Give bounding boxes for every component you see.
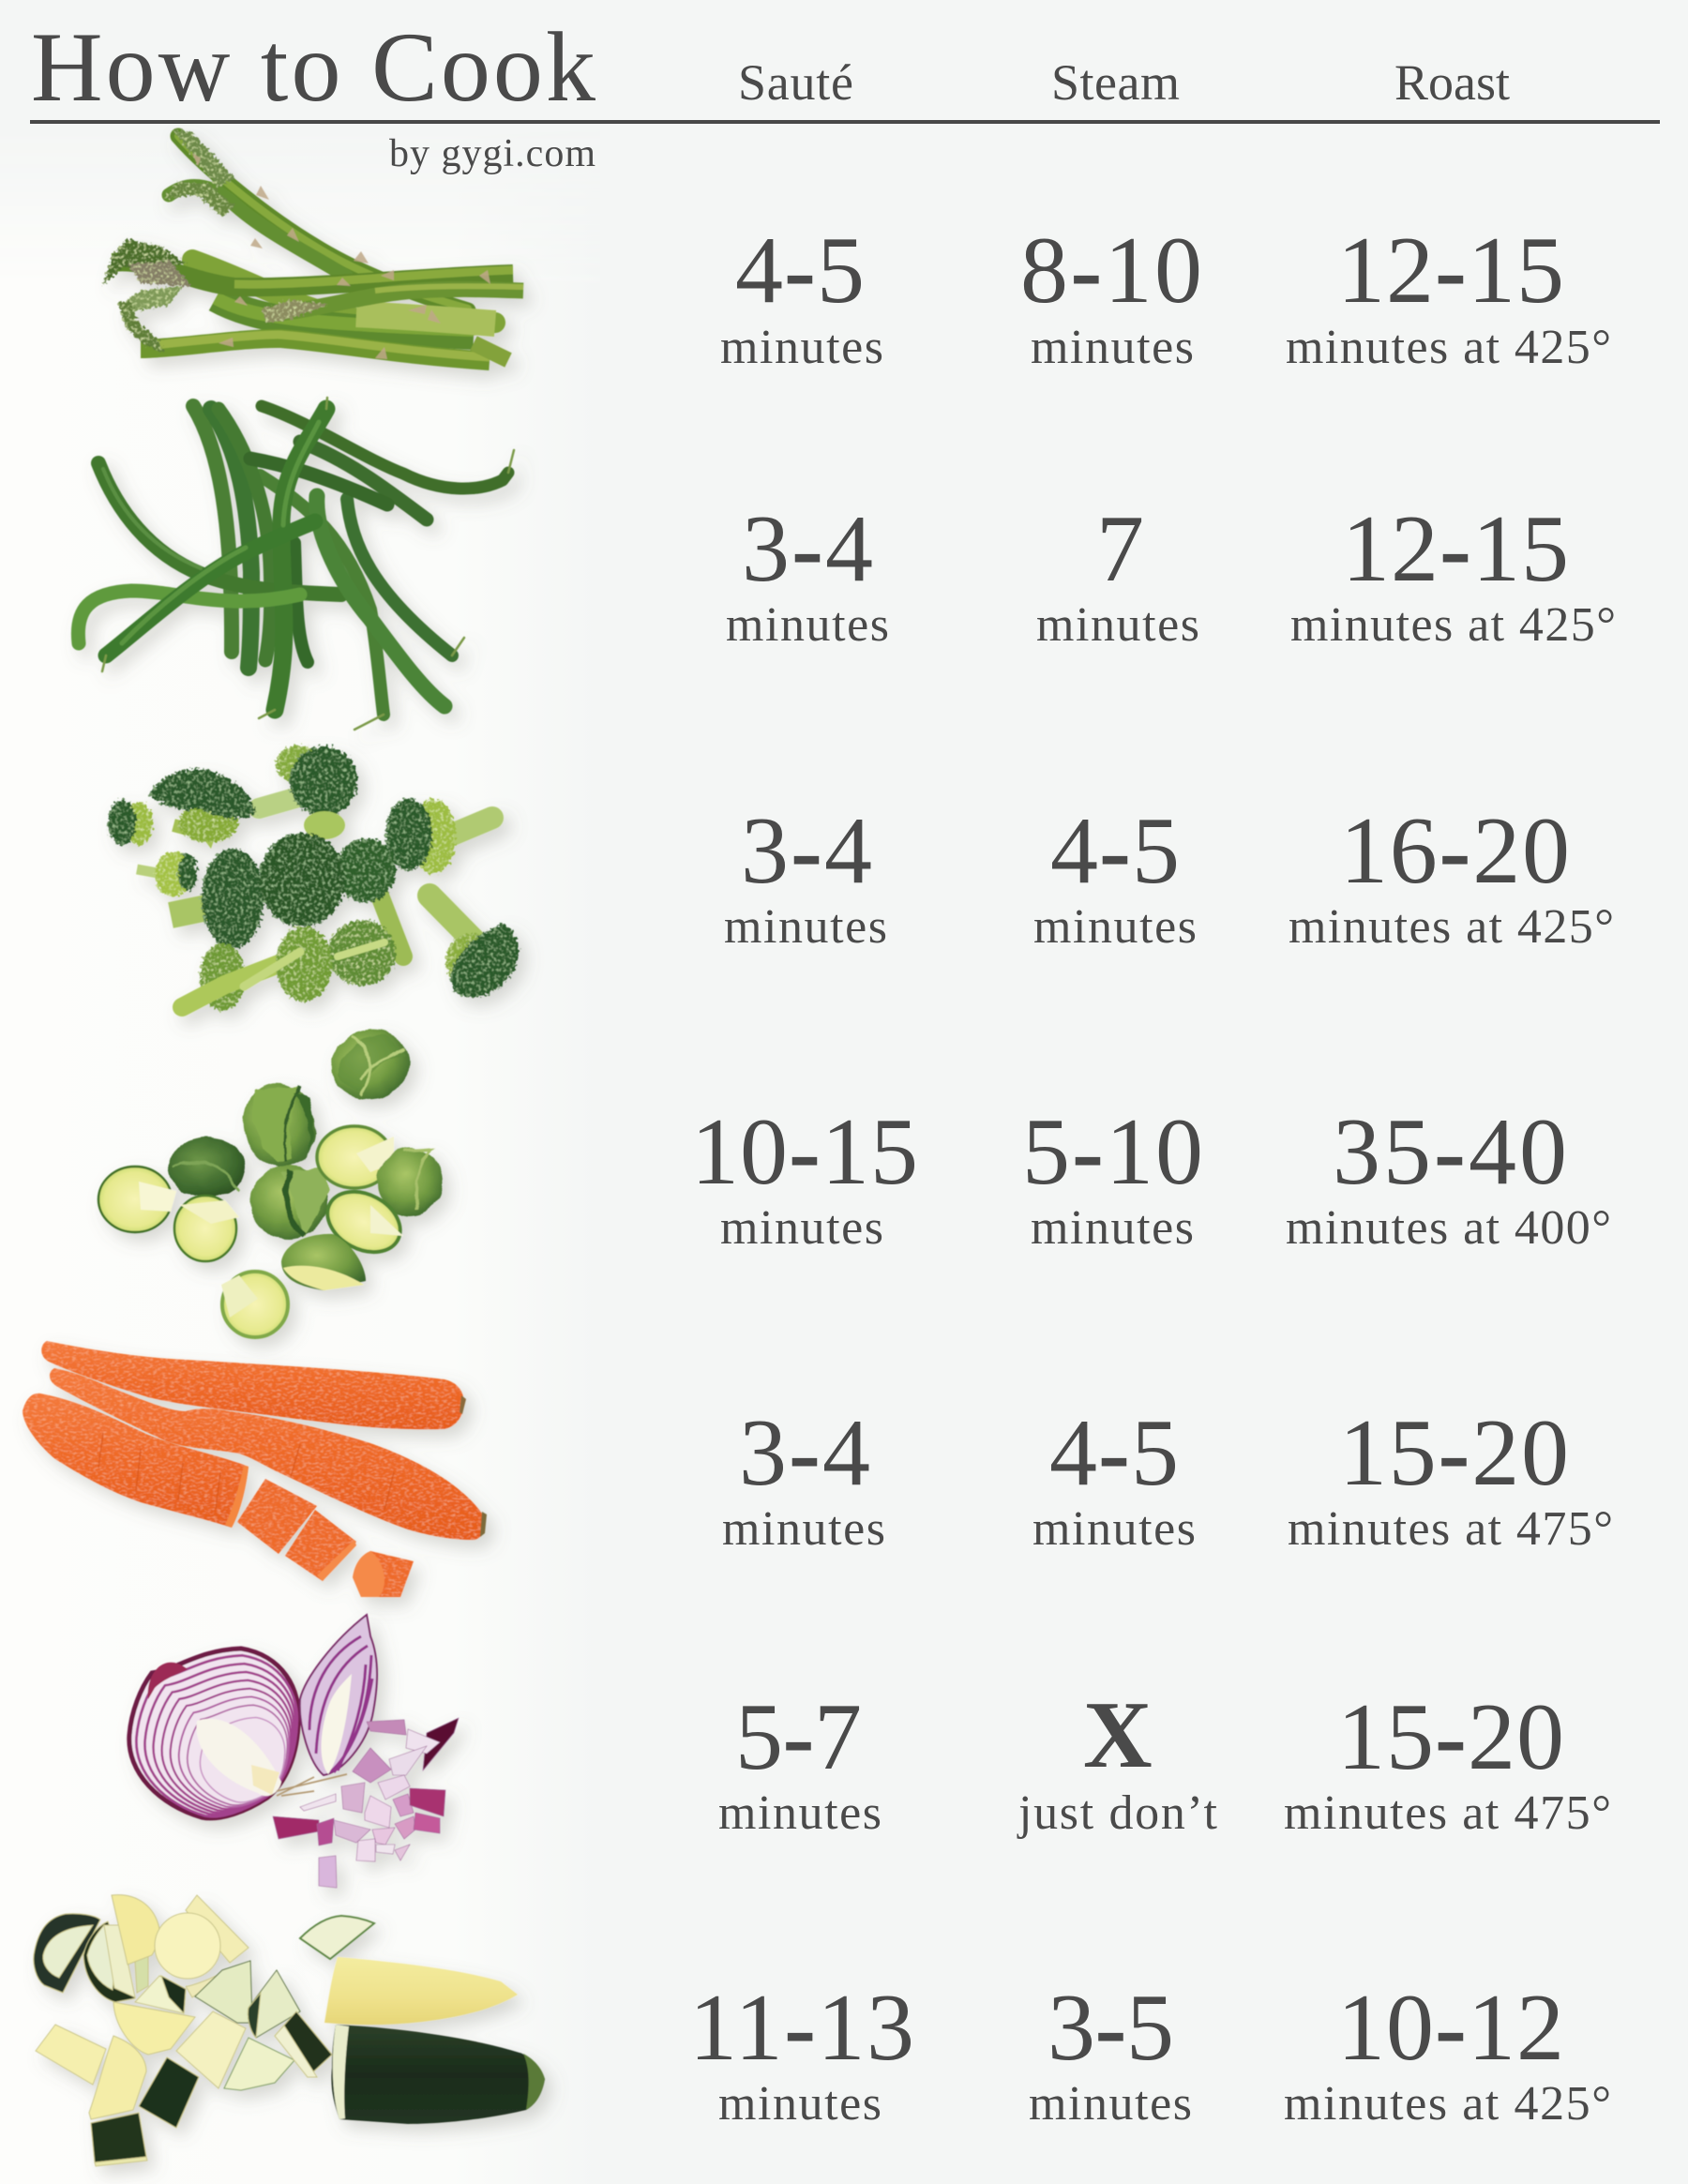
cell: broccoli sauté xyxy=(724,798,887,954)
icon: squash and zucchini xyxy=(34,1895,545,2166)
onion wedge xyxy=(300,1615,377,1775)
cell: onion steam: X xyxy=(1083,1682,1153,1788)
sprout: whole right xyxy=(377,1149,443,1216)
sprout: dark xyxy=(169,1137,246,1197)
cell: carrots sauté xyxy=(722,1400,885,1556)
cell: asparagus sauté: 4-5 xyxy=(735,218,865,324)
icon: green beans xyxy=(78,398,514,730)
cell: sprouts sauté xyxy=(691,1099,918,1255)
broccoli floret: side xyxy=(137,849,264,948)
icon: carrots xyxy=(23,1341,487,1597)
cell: carrots steam xyxy=(1032,1400,1196,1556)
broccoli floret: bottom xyxy=(182,926,332,1011)
chopped squash pieces xyxy=(34,1895,332,2166)
broccoli floret: lower stalk xyxy=(259,811,403,956)
header rule xyxy=(30,120,1660,124)
title: How to Cook xyxy=(31,12,595,122)
cell: sprouts steam xyxy=(1022,1099,1203,1255)
cell: broccoli roast: minutes at 425° xyxy=(1289,900,1614,954)
cell: carrots roast xyxy=(1288,1400,1613,1556)
cell: asparagus steam xyxy=(1020,218,1202,374)
cell: asparagus sauté xyxy=(720,218,883,374)
row: green bean times xyxy=(726,496,1616,652)
cell: onion steam xyxy=(1017,1682,1218,1840)
carrot: lower cut xyxy=(23,1393,249,1528)
chopped onion xyxy=(273,1718,459,1888)
sprout: whole upper xyxy=(235,1077,324,1174)
cell: onion roast xyxy=(1284,1684,1611,1840)
row: brussels sprouts times xyxy=(691,1099,1611,1255)
row: squash times xyxy=(689,1975,1611,2131)
cell: carrots steam: 4-5 xyxy=(1049,1400,1179,1506)
byline: by gygi.com xyxy=(389,132,595,175)
cell: green beans roast: 12-15 xyxy=(1342,496,1569,602)
cell: asparagus roast: minutes at 425° xyxy=(1286,321,1611,374)
cell: carrots steam: minutes xyxy=(1032,1502,1196,1556)
broccoli floret: top left xyxy=(108,769,256,849)
cell: broccoli sauté: 3-4 xyxy=(741,798,872,904)
cell: broccoli steam: minutes xyxy=(1033,900,1197,954)
sprout: cut left xyxy=(98,1167,176,1232)
carrot: skin ridges xyxy=(98,1433,394,1510)
cell: carrots sauté: 3-4 xyxy=(739,1400,870,1506)
cell: asparagus steam: 8-10 xyxy=(1020,218,1202,324)
cell: green beans roast: minutes at 425° xyxy=(1290,598,1616,652)
cell: green beans sauté: minutes xyxy=(726,598,889,652)
icon: red onion xyxy=(129,1615,459,1888)
cell: onion roast: minutes at 475° xyxy=(1284,1786,1611,1840)
cell: green beans steam: 7 xyxy=(1096,496,1144,602)
cell: carrots roast: 15-20 xyxy=(1339,1400,1569,1506)
cell: green beans sauté: 3-4 xyxy=(742,496,873,602)
cell: sprouts sauté: 10-15 xyxy=(691,1099,918,1205)
column heading: Roast: Roast xyxy=(1394,54,1510,111)
cell: sprouts steam: 5-10 xyxy=(1022,1099,1203,1205)
cell: squash steam xyxy=(1029,1975,1192,2131)
broccoli floret: top center xyxy=(259,746,357,816)
cell: sprouts steam: minutes xyxy=(1031,1201,1194,1255)
sprout: whole top xyxy=(324,1020,417,1108)
cell: onion roast: 15-20 xyxy=(1337,1684,1564,1790)
cell: onion sauté: minutes xyxy=(718,1786,882,1840)
cell: asparagus steam: minutes xyxy=(1031,321,1194,374)
asparagus heads xyxy=(103,129,328,352)
sprout: cut bottom xyxy=(221,1272,288,1337)
cell: green beans sauté xyxy=(726,496,889,652)
broccoli floret: far right xyxy=(430,896,519,998)
sprout: cut middle xyxy=(174,1196,239,1261)
carrot: middle xyxy=(50,1368,484,1540)
cell: sprouts roast: minutes at 400° xyxy=(1286,1201,1611,1255)
onion half xyxy=(129,1649,347,1818)
cell: broccoli sauté: minutes xyxy=(724,900,887,954)
zucchini wedge top xyxy=(300,1916,374,1959)
yellow squash xyxy=(324,1957,518,2025)
cell: squash roast xyxy=(1284,1975,1611,2131)
carrot: top xyxy=(41,1341,464,1429)
icon: brussels sprouts xyxy=(98,1020,443,1337)
carrot: slices xyxy=(237,1479,414,1597)
icon: asparagus xyxy=(103,129,523,361)
cell: squash sauté: 11-13 xyxy=(689,1975,914,2081)
cell: squash sauté: minutes xyxy=(718,2077,882,2131)
cell: sprouts sauté: minutes xyxy=(720,1201,883,1255)
cell: green beans steam: minutes xyxy=(1036,598,1199,652)
cell: sprouts roast: 35-40 xyxy=(1333,1099,1567,1205)
icon: broccoli xyxy=(108,746,519,1011)
cell: squash steam: minutes xyxy=(1029,2077,1192,2131)
cell: squash sauté xyxy=(689,1975,914,2131)
cell: broccoli roast: 16-20 xyxy=(1340,798,1570,904)
cell: green beans roast xyxy=(1290,496,1616,652)
sprout: cut upper right xyxy=(317,1126,394,1188)
cell: carrots sauté: minutes xyxy=(722,1502,885,1556)
cell: broccoli roast xyxy=(1289,798,1614,954)
cell: onion sauté: 5-7 xyxy=(735,1684,862,1790)
row: carrot times xyxy=(722,1400,1613,1556)
cell: broccoli steam: 4-5 xyxy=(1050,798,1180,904)
row: broccoli times xyxy=(724,798,1614,954)
cell: asparagus sauté: minutes xyxy=(720,321,883,374)
column heading: Steam: Steam xyxy=(1051,54,1180,111)
cell: squash roast: 10-12 xyxy=(1337,1975,1564,2081)
row: onion times xyxy=(718,1682,1611,1840)
zucchini xyxy=(331,2025,545,2124)
cell: asparagus roast xyxy=(1286,218,1611,374)
cell: carrots roast: minutes at 475° xyxy=(1288,1502,1613,1556)
cell: sprouts roast xyxy=(1286,1099,1611,1255)
column heading: Sauté: Sauté xyxy=(738,54,853,111)
cell: broccoli steam xyxy=(1033,798,1197,954)
cell: green beans steam xyxy=(1036,496,1199,652)
cell: onion sauté xyxy=(718,1684,882,1840)
cell: asparagus roast: 12-15 xyxy=(1337,218,1564,324)
sprout: whole center xyxy=(250,1166,328,1239)
sprout: cut lower right xyxy=(317,1180,411,1264)
row: asparagus times xyxy=(720,218,1611,374)
broccoli floret: right xyxy=(385,799,492,874)
cell: onion steam: just don’t xyxy=(1017,1786,1218,1840)
sprout: half bottom right xyxy=(281,1234,366,1290)
broccoli floret: lower light xyxy=(328,920,396,986)
cell: squash steam: 3-5 xyxy=(1047,1975,1174,2081)
cell: squash roast: minutes at 425° xyxy=(1284,2077,1611,2131)
